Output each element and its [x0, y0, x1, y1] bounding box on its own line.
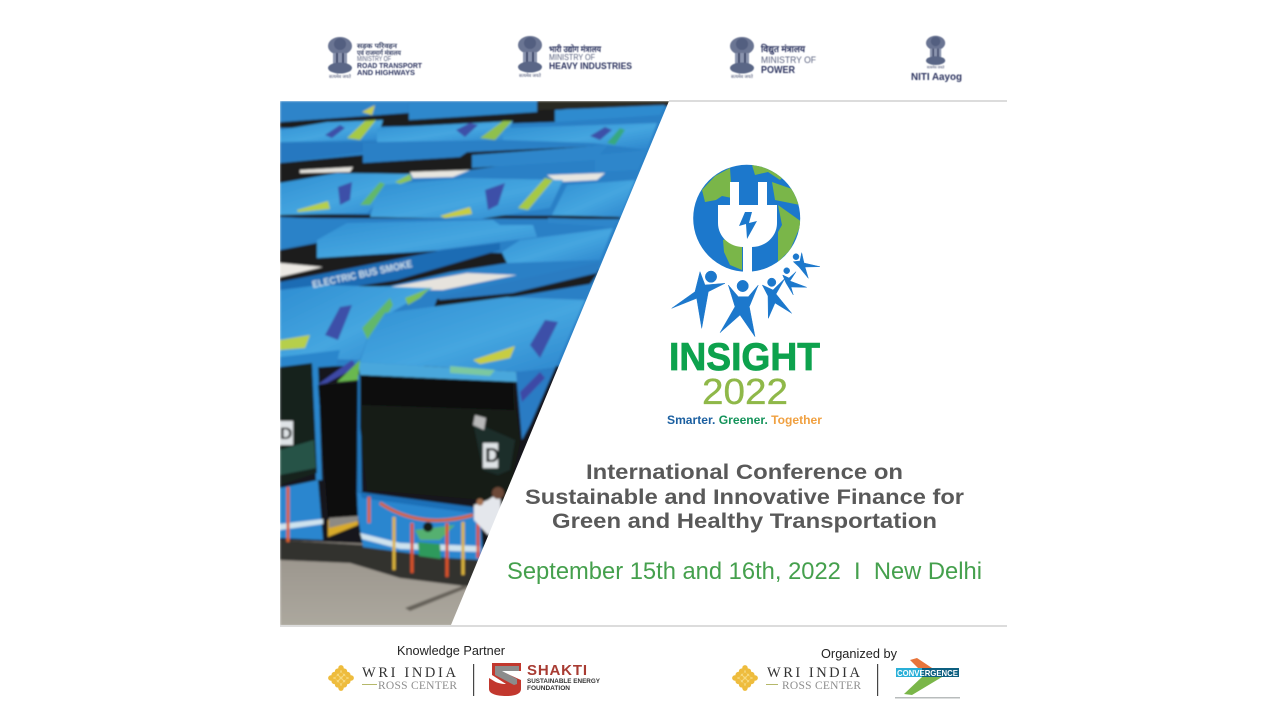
logo: Ministry of Power: MINISTRY OF [761, 55, 816, 66]
ground [280, 540, 484, 625]
logo: Convergence: CONVERGENCE [897, 668, 958, 678]
logo: Ministry of Road Transport and Highways: MINISTRY OF [357, 56, 391, 63]
garlands [288, 487, 478, 577]
date and venue: September 15th and 16th, 2022 I New Delhi [507, 558, 982, 585]
bottom divider [280, 625, 1007, 627]
logo: Ministry of Heavy Industries: MINISTRY OF [549, 52, 595, 62]
destination markers on the windshields: D [280, 424, 292, 443]
conference title: Sustainable and Innovative Finance for [525, 485, 965, 509]
logo: Shakti Sustainable Energy Foundation: SUSTAINABLE ENERGY [527, 678, 601, 685]
logo: Convergence [895, 658, 960, 698]
logo: Ministry of Road Transport and Highways: ROAD TRANSPORT [357, 61, 422, 70]
wordmark: 2022: 2022 [702, 371, 788, 412]
label: Knowledge Partner: Knowledge Partner [397, 644, 505, 658]
label: Organized by: Organized by [821, 647, 898, 661]
organizer block [731, 647, 960, 698]
logo: NITI Aayog [911, 36, 962, 83]
man in white [474, 487, 504, 535]
tagline: Smarter. Greener. Together [667, 415, 823, 427]
lettering on bus side: ELECTRIC BUS SMOKE [311, 259, 414, 291]
photo: rows of electric buses [280, 101, 670, 626]
destination markers on the windshields [280, 421, 499, 468]
logo: WRI India Ross Center: ROSS CENTER [378, 680, 457, 692]
icon: people lifting the globe [672, 253, 820, 337]
logo: WRI India Ross Center: WRI INDIA [362, 665, 457, 681]
logo: NITI Aayog: NITI Aayog [911, 71, 962, 83]
logo: Ministry of Heavy Industries: भारी उद्योग मंत्रालय [549, 44, 602, 54]
icon: globe with plug [693, 165, 802, 272]
logo: WRI India Ross Center [327, 664, 457, 692]
conference title: Green and Healthy Transportation [552, 509, 937, 533]
logo: WRI India Ross Center [731, 664, 861, 692]
logo: Ministry of Power: विद्युत मंत्रालय [760, 43, 806, 55]
logo: WRI India Ross Center: ROSS CENTER [782, 680, 861, 692]
INSIGHT 2022 logo [667, 165, 823, 427]
destination markers on the windshields: D [485, 445, 499, 467]
logo: Ministry of Road Transport and Highways [328, 37, 422, 79]
wordmark: INSIGHT: INSIGHT [669, 336, 820, 379]
logo: WRI India Ross Center: WRI INDIA [767, 665, 861, 681]
knowledge partner block [327, 644, 601, 696]
conference title [525, 460, 965, 533]
header logos [328, 36, 962, 83]
logo: Ministry of Power [730, 37, 816, 79]
logo: Ministry of Power: POWER [761, 65, 796, 76]
gaps between bus rows [280, 101, 620, 313]
conference title: International Conference on [586, 460, 903, 484]
logo: Ministry of Road Transport and Highways: सड़क परिवहन [356, 42, 397, 50]
upper bus rows [280, 101, 670, 360]
logo: Ministry of Road Transport and Highways: AND HIGHWAYS [357, 68, 415, 77]
front bus [280, 297, 585, 577]
logo: Shakti Sustainable Energy Foundation [489, 662, 601, 696]
logo: Ministry of Road Transport and Highways: एवं राजमार्ग मंत्रालय [356, 49, 401, 57]
logo: Ministry of Heavy Industries [518, 36, 632, 78]
logo: Ministry of Heavy Industries: HEAVY INDUSTRIES [549, 61, 632, 72]
logo: Shakti Sustainable Energy Foundation: FOUNDATION [527, 685, 570, 692]
logo: Shakti Sustainable Energy Foundation: SHAKTI [527, 662, 587, 679]
top divider [669, 100, 1007, 102]
